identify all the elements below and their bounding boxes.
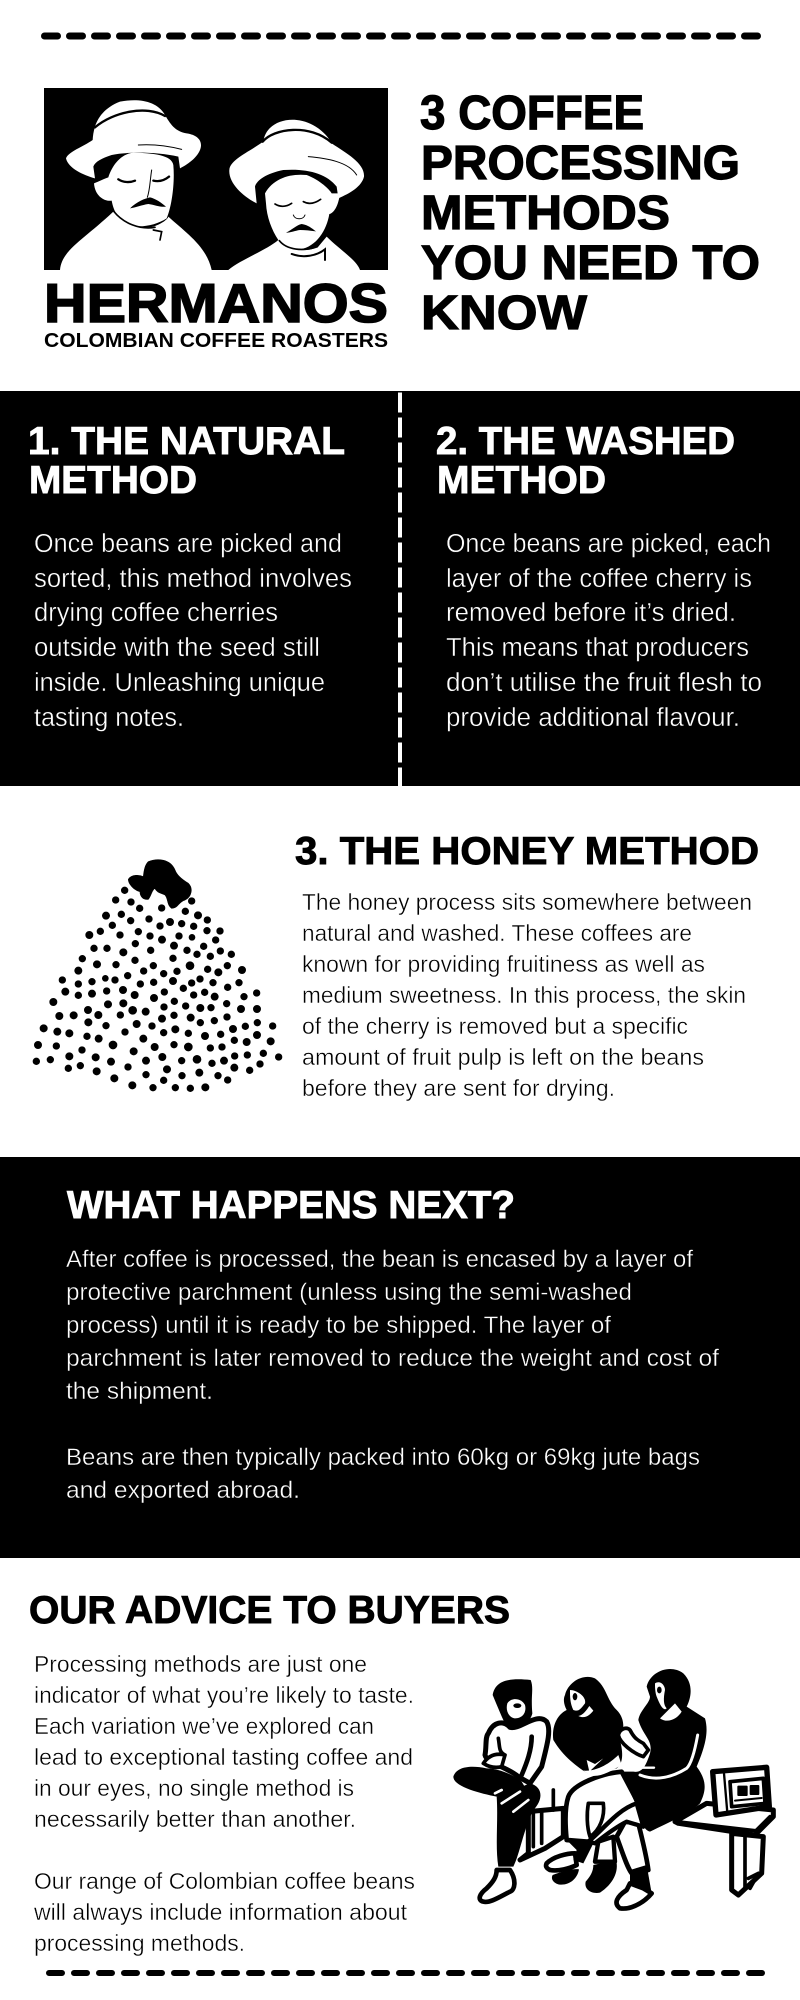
heading: the washed method: METHOD: [437, 459, 606, 502]
text: after processing: and exported abroad.: [66, 1477, 300, 1504]
title: YOU NEED TO: [421, 237, 760, 290]
text: after processing: After coffee is processed, the bean is encased by a layer of: [66, 1246, 693, 1273]
text: honey method description: The honey process sits somewhere between: [302, 889, 752, 915]
title: PROCESSING: [421, 137, 740, 190]
logo wordmark: HERMANOS: [44, 272, 388, 334]
icon: three people on a bench: [453, 1669, 773, 1909]
top dashed rule: [44, 32, 758, 40]
panel background: [0, 391, 800, 786]
text: after processing: process) until it is ready to be shipped. The layer of: [66, 1312, 611, 1339]
logo portrait illustration: [44, 88, 388, 270]
woman on right: [588, 1669, 707, 1909]
panel: what happens next: [0, 1157, 800, 1558]
text: honey method description: [302, 889, 752, 1101]
logo tagline: COLOMBIAN COFFEE ROASTERS: [44, 330, 388, 352]
bottom dashed rule: [49, 1970, 762, 1976]
icon: pile of coffee beans: [33, 860, 282, 1092]
text: after processing: parchment is later removed to reduce the weight and cost of: [66, 1345, 719, 1372]
panel: natural and washed methods: [0, 391, 800, 786]
heading: the washed method: [436, 420, 735, 502]
text: honey method description: known for providing fruitiness as well as: [302, 951, 705, 977]
man on left: [453, 1679, 549, 1902]
text: washed method description: provide additional flavour.: [446, 704, 740, 732]
text: advice to buyers: [33, 1651, 415, 1956]
panel background: [0, 1157, 800, 1558]
text: advice to buyers: necessarily better than another.: [34, 1806, 356, 1832]
text: washed method description: This means that producers: [446, 634, 749, 662]
title: 3 COFFEE: [420, 87, 644, 140]
text: washed method description: don’t utilise the fruit flesh to: [446, 669, 762, 697]
title: [420, 87, 760, 340]
vertical dashed divider: [398, 392, 402, 786]
logo: Hermanos Colombian Coffee Roasters: [44, 88, 388, 352]
text: after processing: Beans are then typically packed into 60kg or 69kg jute bags: [66, 1444, 700, 1471]
heading: the natural method: 1. THE NATURAL: [28, 420, 345, 463]
heading: the natural method: METHOD: [29, 459, 197, 502]
text: natural method description: sorted, this method involves: [34, 565, 352, 593]
text: honey method description: natural and washed. These coffees are: [302, 920, 692, 946]
heading: our advice to buyers: OUR ADVICE TO BUYERS: [29, 1589, 510, 1632]
title: METHODS: [421, 187, 670, 240]
title: KNOW: [421, 287, 588, 340]
text: advice to buyers: processing methods.: [34, 1930, 245, 1956]
bag: [713, 1767, 769, 1815]
text: advice to buyers: indicator of what you’re likely to taste.: [34, 1682, 414, 1708]
text: advice to buyers: Each variation we’ve explored can: [34, 1713, 374, 1739]
text: washed method description: [446, 530, 771, 732]
text: after processing: protective parchment (unless using the semi-washed: [66, 1279, 632, 1306]
heading: what happens next: WHAT HAPPENS NEXT?: [67, 1184, 515, 1227]
text: advice to buyers: lead to exceptional tasting coffee and: [34, 1744, 413, 1770]
heading: the natural method: [28, 420, 345, 502]
text: after processing: [66, 1246, 719, 1504]
text: advice to buyers: Our range of Colombian coffee beans: [34, 1868, 415, 1894]
text: natural method description: outside with the seed still: [34, 634, 320, 662]
heading: the honey method: 3. THE HONEY METHOD: [295, 830, 759, 873]
text: honey method description: of the cherry is removed but a specific: [302, 1013, 688, 1039]
woman in the middle: [546, 1677, 638, 1893]
text: washed method description: Once beans are picked, each: [446, 530, 771, 558]
text: washed method description: layer of the coffee cherry is: [446, 565, 752, 593]
text: natural method description: drying coffee cherries: [34, 599, 278, 627]
text: after processing: the shipment.: [66, 1378, 213, 1405]
text: natural method description: inside. Unleashing unique: [34, 669, 325, 697]
heading: the washed method: 2. THE WASHED: [436, 420, 735, 463]
text: washed method description: removed before it’s dried.: [446, 599, 736, 627]
text: natural method description: Once beans are picked and: [34, 530, 342, 558]
text: natural method description: tasting notes.: [34, 704, 184, 732]
text: natural method description: [34, 530, 352, 732]
text: advice to buyers: Processing methods are just one: [34, 1651, 367, 1677]
text: honey method description: amount of fruit pulp is left on the beans: [302, 1044, 704, 1070]
bench: [520, 1803, 773, 1895]
text: advice to buyers: in our eyes, no single method is: [34, 1775, 354, 1801]
text: advice to buyers: will always include information about: [33, 1899, 408, 1925]
text: honey method description: medium sweetness. In this process, the skin: [302, 982, 746, 1008]
text: honey method description: before they are sent for drying.: [302, 1075, 615, 1101]
